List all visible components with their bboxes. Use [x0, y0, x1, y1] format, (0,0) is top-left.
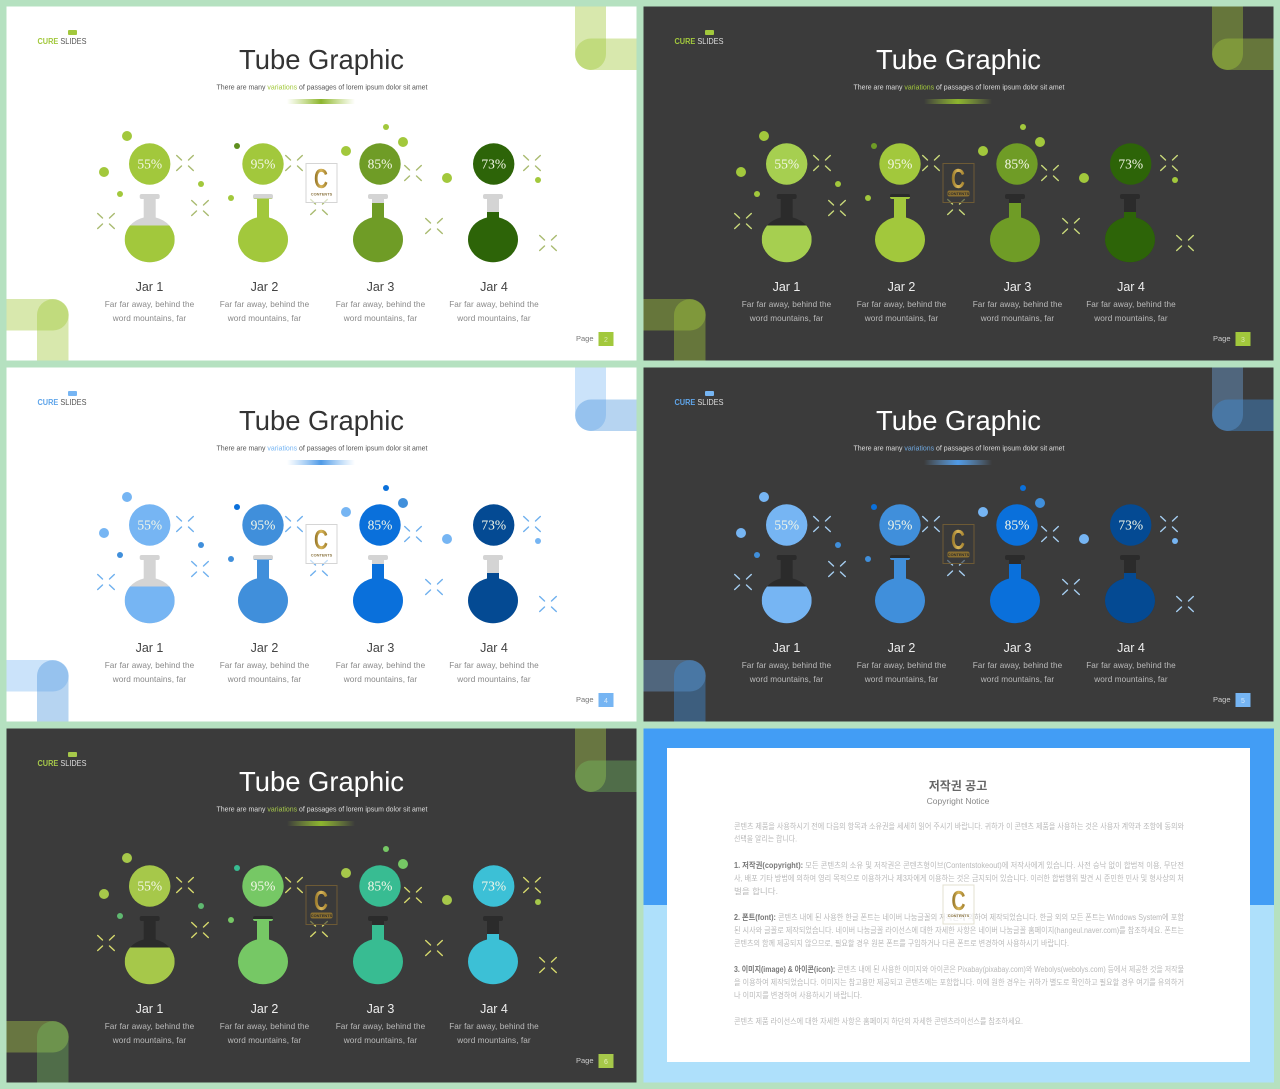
logo — [38, 30, 87, 46]
jar 2: Jar 2 — [251, 641, 278, 655]
logo: CURE SLIDES — [38, 758, 87, 768]
jar 3: word mountains, far — [343, 1036, 417, 1045]
notice section 2: 콘텐츠의 함께 제공되지 않으므로, 필요할 경우 원본 폰트를 구입하거나 다른 폰트로 변경하여 사용하시기 바랍니다. — [734, 938, 1069, 948]
sparkles — [735, 516, 1193, 612]
panel: slide 3 light blue — [6, 368, 636, 722]
jar 1: 55% — [774, 518, 799, 532]
jar 2: word mountains, far — [227, 314, 301, 323]
page number — [1213, 332, 1250, 346]
page number: Page — [576, 334, 594, 343]
floating dots — [99, 124, 541, 201]
page number: 2 — [604, 337, 608, 344]
page number: Page — [1213, 334, 1231, 343]
watermark — [306, 163, 337, 202]
page number: 4 — [604, 698, 608, 705]
corner decoration top right — [575, 6, 636, 70]
jar 4: 73% — [481, 156, 506, 172]
jar 1: Far far away, behind the — [105, 661, 195, 670]
jar 3: Far far away, behind the — [336, 300, 426, 309]
jar 3: 85% — [368, 156, 392, 172]
corner decoration bottom left — [644, 660, 706, 722]
jar 1: Jar 1 — [136, 280, 163, 294]
logo: CURE SLIDES — [674, 397, 724, 407]
jar 3 — [336, 865, 426, 1045]
jar 3: 85% — [368, 518, 392, 532]
jar 2: Far far away, behind the — [220, 1022, 310, 1031]
watermark: CONTENTS — [948, 913, 970, 918]
jar 3: word mountains, far — [343, 314, 417, 323]
jar 4 — [1086, 143, 1176, 323]
corner decoration bottom left — [644, 299, 706, 360]
jar 4: Jar 4 — [480, 280, 508, 294]
title: Tube Graphic — [239, 405, 404, 436]
notice section 3: 을 이용하여 제작되었습니다. 이미지는 참고용만 제공되고 콘텐츠에는 포함합니다. 이에 원한 경우는 귀하가 별도로 확인하고 필요할 경우 여기를 유의하거 — [734, 977, 1184, 987]
jar 2: Far far away, behind the — [857, 661, 947, 670]
floating dots — [736, 485, 1178, 562]
corner decoration top right — [575, 368, 636, 431]
jar 1: 55% — [137, 518, 162, 532]
jar 3: word mountains, far — [980, 675, 1054, 684]
jar 1: 55% — [774, 156, 799, 172]
subtitle: There are many variations of passages of lorem ipsum dolor sit amet — [854, 446, 1065, 452]
panel: copyright notice — [644, 728, 1274, 1082]
notice heading — [927, 778, 990, 806]
jar 1: word mountains, far — [112, 1036, 186, 1045]
jar 4: Far far away, behind the — [449, 661, 539, 670]
jar 2: word mountains, far — [227, 1036, 301, 1045]
jar 3: Far far away, behind the — [336, 1022, 426, 1031]
jar 4: 73% — [1118, 518, 1143, 532]
notice heading: Copyright Notice — [927, 796, 990, 806]
page number: 5 — [1241, 698, 1245, 705]
title: Tube Graphic — [876, 405, 1041, 436]
jar 3 — [973, 143, 1063, 323]
notice section 1: 벌을 합니다. — [734, 886, 778, 896]
logo — [674, 30, 724, 46]
corner decoration top right — [575, 728, 636, 792]
watermark — [306, 885, 337, 924]
notice section 3 — [734, 964, 1184, 1000]
jar 2 — [857, 504, 947, 684]
jar 3 — [336, 143, 426, 323]
jar 3 — [973, 504, 1063, 684]
jar 1 — [105, 504, 195, 684]
corner decoration bottom left — [6, 660, 69, 722]
jar 1: word mountains, far — [112, 314, 186, 323]
jar 2: Jar 2 — [251, 1002, 278, 1016]
logo — [674, 391, 724, 407]
jar 1 — [742, 504, 832, 684]
corner decoration top right — [1212, 368, 1274, 431]
jar 2: 95% — [888, 156, 912, 172]
jar 3: Jar 3 — [367, 280, 394, 294]
jar 2: 95% — [251, 878, 275, 894]
page number — [1213, 693, 1250, 707]
sparkles — [98, 156, 556, 250]
jar 3: 85% — [1005, 518, 1029, 532]
jar 2: 95% — [888, 518, 912, 532]
jar 4: Jar 4 — [480, 1002, 508, 1016]
gradient underline — [287, 460, 355, 465]
panel: slide 2 dark green — [644, 6, 1274, 360]
logo: CURE SLIDES — [38, 36, 87, 46]
notice section 2 — [734, 912, 1185, 948]
jar 1: Jar 1 — [773, 641, 800, 655]
jar 3: 85% — [368, 878, 392, 894]
jar 4: word mountains, far — [456, 314, 531, 323]
jar 1: Jar 1 — [136, 641, 163, 655]
page number: 3 — [1241, 337, 1245, 344]
jar 2: 95% — [251, 518, 275, 532]
watermark: CONTENTS — [948, 191, 970, 196]
sparkles — [735, 156, 1193, 250]
page number: Page — [576, 1056, 594, 1065]
jar 2: word mountains, far — [864, 675, 938, 684]
jar 4: word mountains, far — [1093, 675, 1168, 684]
jar 4: 73% — [481, 878, 506, 894]
jar 2: word mountains, far — [227, 675, 301, 684]
jar 3: Jar 3 — [367, 1002, 394, 1016]
subtitle: There are many variations of passages of lorem ipsum dolor sit amet — [216, 446, 428, 452]
floating dots — [99, 485, 541, 562]
notice intro — [734, 821, 1185, 844]
jar 1 — [742, 143, 832, 323]
notice section 3: 3. 이미지(image) & 아이콘(icon): 콘텐츠 내에 된 사용한 이미지와 아이콘은 Pixabay(pixabay.com)와 Webolys(webolys.com) 등에서 제공한 것을 저작물 — [734, 964, 1184, 974]
jar 4: Far far away, behind the — [449, 300, 539, 309]
jar 4: word mountains, far — [456, 1036, 531, 1045]
jar 4: Far far away, behind the — [1086, 661, 1176, 670]
jar 4: Jar 4 — [1117, 280, 1145, 294]
jar 4: Jar 4 — [1117, 641, 1145, 655]
jar 2: 95% — [251, 156, 275, 172]
sparkles — [98, 878, 556, 972]
notice section 1 — [734, 860, 1184, 896]
jar 4 — [1086, 504, 1176, 684]
jar 1 — [105, 143, 195, 323]
jar 2: Jar 2 — [888, 641, 915, 655]
title: Tube Graphic — [876, 44, 1041, 75]
watermark — [943, 524, 974, 564]
jar 4: word mountains, far — [456, 675, 531, 684]
watermark: C — [314, 524, 328, 555]
watermark: C — [951, 524, 965, 555]
watermark: C — [952, 885, 966, 916]
watermark — [943, 885, 974, 924]
logo — [38, 391, 87, 407]
page number: Page — [1213, 695, 1231, 704]
jar 1: Far far away, behind the — [742, 661, 832, 670]
jar 1: Jar 1 — [773, 280, 800, 294]
jar 3: Far far away, behind the — [973, 300, 1063, 309]
watermark — [943, 163, 974, 202]
jar 4: word mountains, far — [1093, 314, 1168, 323]
notice section 2: 2. 폰트(font): 콘텐츠 내에 된 사용한 한글 폰트는 네이버 나눔글꼴의 저작권에 의하여 제작되었습니다. 한글 외의 모든 폰트는 Windows System에 포함 — [734, 912, 1185, 922]
jar 1: word mountains, far — [112, 675, 186, 684]
jar 4: Far far away, behind the — [449, 1022, 539, 1031]
gradient underline — [287, 99, 355, 104]
notice intro: 선택을 알리는 합니다. — [734, 834, 797, 844]
page number — [576, 693, 614, 707]
jar 3: Far far away, behind the — [336, 661, 426, 670]
page number — [576, 1054, 614, 1068]
watermark — [306, 524, 337, 564]
watermark: CONTENTS — [948, 552, 970, 557]
jar 4 — [449, 143, 539, 323]
sparkles — [98, 516, 556, 612]
corner decoration bottom left — [6, 1021, 69, 1082]
corner decoration bottom left — [6, 299, 69, 360]
page number: Page — [576, 695, 594, 704]
title: Tube Graphic — [239, 44, 404, 75]
jar 4: 73% — [1118, 156, 1143, 172]
jar 1: Far far away, behind the — [105, 300, 195, 309]
page number: 6 — [604, 1059, 608, 1066]
jar 4: Far far away, behind the — [1086, 300, 1176, 309]
jar 4: 73% — [481, 518, 506, 532]
jar 4 — [449, 865, 539, 1045]
watermark: CONTENTS — [311, 192, 333, 196]
subtitle: There are many variations of passages of lorem ipsum dolor sit amet — [854, 84, 1065, 92]
watermark: CONTENTS — [311, 913, 333, 918]
watermark: C — [951, 163, 965, 194]
jar 2: Far far away, behind the — [220, 661, 310, 670]
logo: CURE SLIDES — [38, 397, 87, 407]
title: Tube Graphic — [239, 766, 404, 797]
gradient underline — [924, 99, 992, 104]
jar 4 — [449, 504, 539, 684]
jar 3 — [336, 504, 426, 684]
jar 2 — [220, 143, 310, 323]
subtitle: There are many variations of passages of lorem ipsum dolor sit amet — [216, 806, 428, 814]
watermark: C — [314, 885, 328, 916]
jar 4: Jar 4 — [480, 641, 508, 655]
jar 1 — [105, 865, 195, 1045]
logo: CURE SLIDES — [674, 36, 724, 46]
jar 2 — [220, 865, 310, 1045]
panel: slide 5 dark multicolour — [6, 728, 636, 1082]
logo — [38, 752, 87, 768]
jar 2: Far far away, behind the — [857, 300, 947, 309]
jar 3: Jar 3 — [367, 641, 394, 655]
notice section 1: 1. 저작권(copyright): 모든 콘텐츠의 소유 및 저작권은 콘텐츠형이브(Contentstokeout)에 저작사에게 있습니다. 사전 승낙 없이 합법적 이용, 무단전 — [734, 860, 1184, 870]
jar 1: word mountains, far — [749, 314, 823, 323]
watermark: CONTENTS — [311, 552, 333, 558]
jar 3: Jar 3 — [1004, 280, 1031, 294]
jar 1: 55% — [137, 878, 162, 894]
gradient underline — [287, 821, 355, 826]
jar 3: Jar 3 — [1004, 641, 1031, 655]
page number — [576, 332, 614, 346]
subtitle: There are many variations of passages of lorem ipsum dolor sit amet — [216, 84, 428, 92]
jar 2: word mountains, far — [864, 314, 938, 323]
panel: slide 1 light green — [6, 6, 636, 360]
corner decoration top right — [1212, 6, 1274, 70]
notice section 2: 된 시사와 글꼴로 제작되었습니다. 네이버 나눔글꼴 라이선스에 대한 자세한 사항은 네이버 나눔글꼴 홈페이지(hangeul.naver.com)를 참조하세요. 폰트는 — [734, 925, 1184, 935]
floating dots — [736, 124, 1178, 201]
panel: slide 4 dark blue — [644, 368, 1274, 722]
jar 1: Far far away, behind the — [742, 300, 832, 309]
gradient underline — [924, 460, 992, 465]
jar 2 — [220, 504, 310, 684]
jar 1: Far far away, behind the — [105, 1022, 195, 1031]
floating dots — [99, 846, 541, 923]
jar 3: Far far away, behind the — [973, 661, 1063, 670]
jar 2: Far far away, behind the — [220, 300, 310, 309]
jar 3: word mountains, far — [343, 675, 417, 684]
watermark: C — [314, 163, 328, 194]
jar 3: word mountains, far — [980, 314, 1054, 323]
jar 1: 55% — [137, 156, 162, 172]
jar 1: Jar 1 — [136, 1002, 163, 1016]
notice section 3: 나 이미지를 변경하여 사용하시기 바랍니다. — [734, 990, 862, 1000]
notice intro: 콘텐츠 제품을 사용하시기 전에 다음의 항목과 소유권을 세세히 읽어 주시기 바랍니다. 귀하가 이 콘텐츠 제품을 사용하는 것은 사용자 계약과 조항에 동의와 — [734, 821, 1185, 831]
notice section 1: 사, 배포 기타 방법에 의하여 영리 목적으로 이용하거나 제3자에게 이용하는 것은 금지되어 있습니다. 이러한 합법행위 발견 시 준민한 민사 및 형사상의 처 — [734, 873, 1184, 883]
jar 1: word mountains, far — [749, 675, 823, 684]
jar 2 — [857, 143, 947, 323]
jar 3: 85% — [1005, 156, 1029, 172]
jar 2: Jar 2 — [888, 280, 915, 294]
notice footer line: 콘텐츠 제품 라이선스에 대한 자세한 사항은 홈페이지 하단의 자세한 콘텐츠라이선스를 참조하세요. — [734, 1016, 1023, 1026]
notice heading: 저작권 공고 — [929, 778, 987, 793]
jar 2: Jar 2 — [251, 280, 278, 294]
